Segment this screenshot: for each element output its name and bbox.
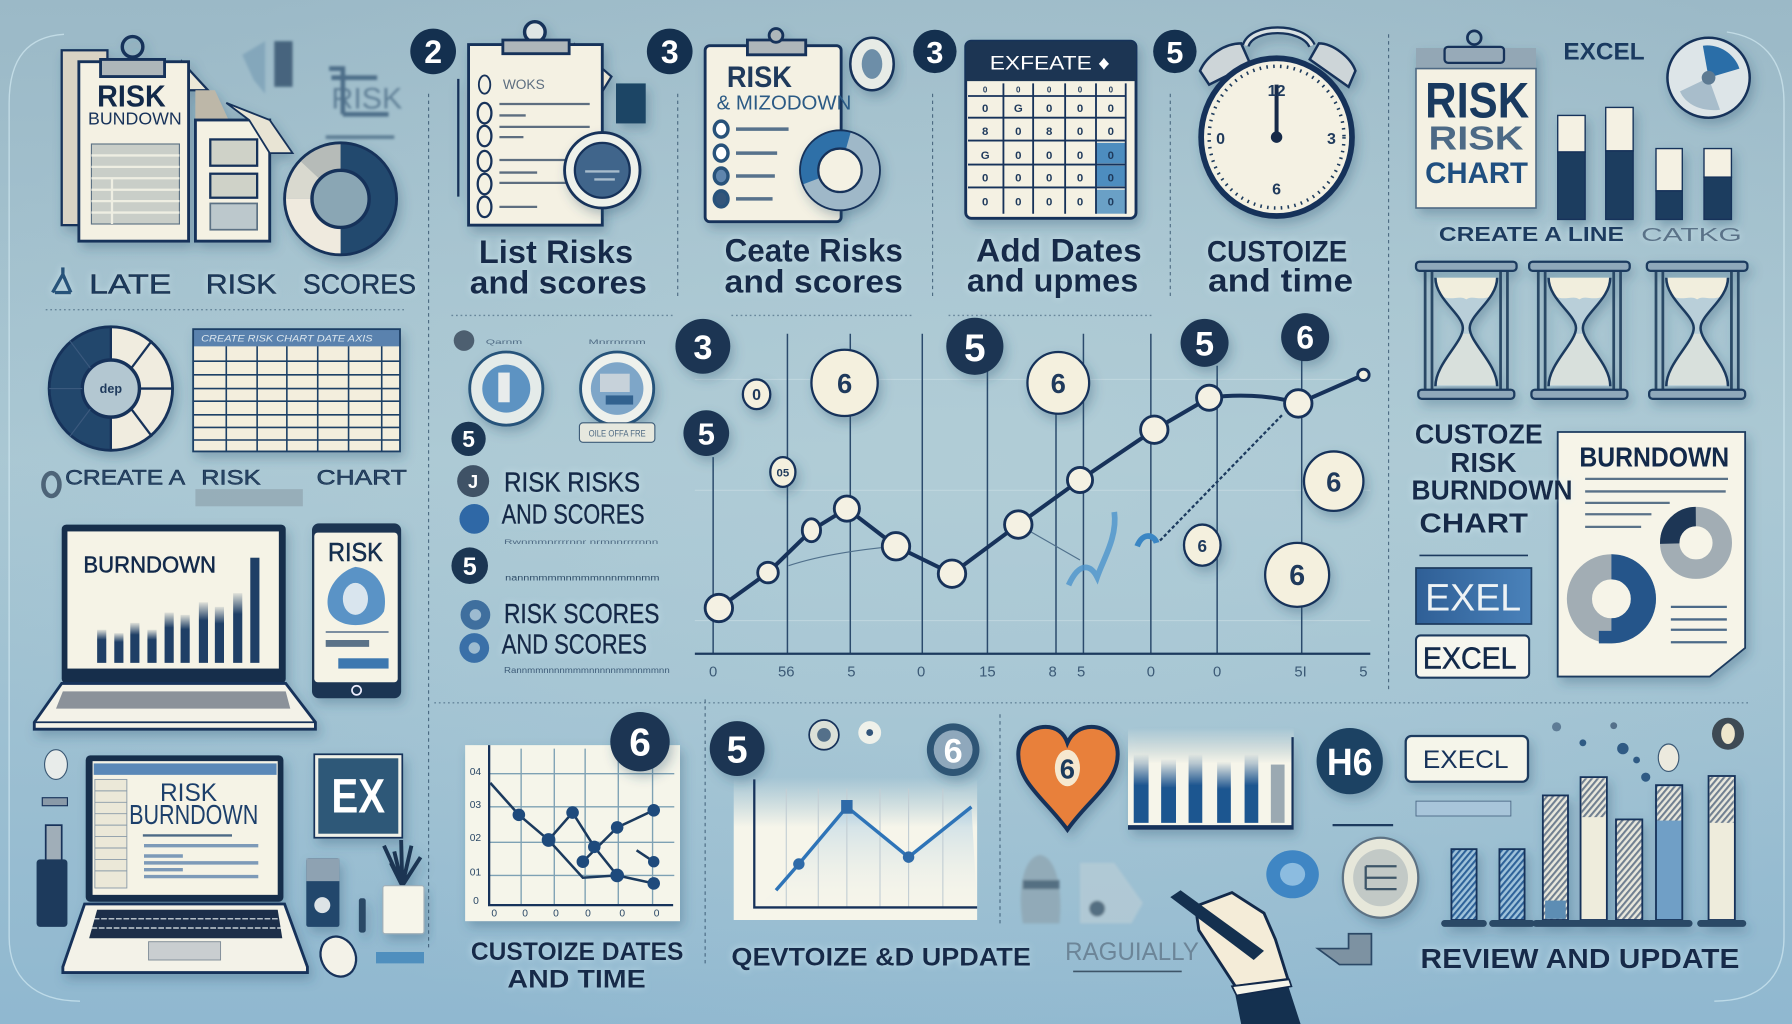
- axis labels: 04: [470, 767, 481, 778]
- laptop bar chart: [97, 558, 259, 663]
- heading: customize risk burndown chart: CUSTOZE: [1415, 418, 1543, 449]
- panel: create risks clipboard: [705, 29, 903, 300]
- scattered icons: [1552, 718, 1744, 782]
- clipboard text: RISK: [1429, 121, 1524, 158]
- callout numerals: 6: [1051, 368, 1066, 399]
- axis labels: 0: [473, 896, 479, 907]
- callout numerals: 05: [777, 468, 790, 480]
- step 5 badge: 5: [462, 426, 475, 452]
- axis labels: 0: [1147, 665, 1155, 681]
- line series: [490, 783, 654, 883]
- chart card: [734, 777, 977, 920]
- axis labels: 8: [1048, 665, 1057, 681]
- laptop title: BURNDOWN: [83, 552, 216, 578]
- heading: late risk scores: SCORES: [303, 269, 416, 300]
- icon: hourglass 2: [1529, 262, 1630, 399]
- heading: review and update: REVIEW AND UPDATE: [1421, 943, 1739, 974]
- axis labels: 0: [709, 665, 717, 681]
- axis labels: 56: [778, 665, 795, 681]
- panel: calendar: [966, 41, 1142, 298]
- checklist rows: WOKS: [503, 77, 545, 92]
- icon: round gauge: [1667, 38, 1750, 118]
- clipboard text: [1425, 72, 1529, 190]
- step 5 badge: [451, 422, 486, 456]
- text: risk risks and scores: AND SCORES: [502, 498, 645, 529]
- icon: calendar: [966, 41, 1136, 218]
- icon: excel tile: [314, 754, 402, 838]
- text: risk scores and scores: RISK SCORES: [504, 598, 659, 629]
- heading: customize risk burndown chart: BURNDOWN: [1411, 474, 1573, 505]
- calendar digits: 80800: [982, 126, 1114, 138]
- panel: customize dates chart: [465, 712, 683, 993]
- heading: create a risk chart: RISK: [201, 465, 261, 490]
- callout numerals: [752, 368, 1341, 592]
- clipboard text: RISK: [1425, 72, 1529, 129]
- heading: list risks and scores: and scores: [470, 265, 647, 301]
- button: blue excel: EXEL: [1425, 576, 1521, 618]
- heading: customize risk burndown chart: RISK: [1450, 447, 1517, 478]
- donut chart: [49, 326, 173, 451]
- calendar digits: 00000: [982, 173, 1114, 185]
- axis labels: 0: [917, 665, 925, 681]
- heading: list risks and scores: List Risks: [479, 234, 633, 270]
- icon: desk objects: [37, 750, 67, 927]
- callout numerals: 6: [1198, 536, 1207, 556]
- heading: customize risk burndown chart: [1411, 418, 1573, 539]
- axis labels: [709, 665, 1368, 681]
- panel: risk scores list: [451, 330, 670, 675]
- heading: customize and time: [1207, 236, 1353, 298]
- heading: create risks and scores: Ceate Risks: [725, 233, 903, 269]
- panel: heart and bars: [1018, 718, 1744, 1024]
- button: execl: [1406, 736, 1528, 782]
- panel: update area chart: [710, 720, 1031, 972]
- heading: add dates and upmes: Add Dates: [976, 233, 1142, 269]
- screen title: risk burndown: RISK: [160, 779, 217, 807]
- panel: hourglasses: [1416, 262, 1747, 399]
- icon: heart: [1018, 727, 1118, 830]
- icon: laptop: [63, 755, 307, 973]
- clipboard title: RISK: [97, 78, 166, 113]
- large donut: [1579, 567, 1643, 631]
- ghost objects: [1021, 855, 1143, 923]
- heading: customize and update: QEVTOIZE &D UPDATE: [731, 944, 1031, 972]
- icon: pen cup: [383, 840, 424, 934]
- step 3 badge: 3: [661, 34, 679, 70]
- callout numerals: 6: [1326, 466, 1341, 497]
- step 6 badge: [610, 712, 670, 771]
- phone title: RISK: [328, 537, 383, 567]
- axis labels: 03: [470, 800, 481, 811]
- callout numerals: 0: [752, 387, 761, 404]
- data points: [705, 369, 1369, 622]
- step 5 badge: [710, 721, 765, 776]
- donut chart: [800, 130, 880, 210]
- heading: late risk scores: [53, 267, 416, 300]
- heading: create a line chart: CREATE A LINE: [1439, 223, 1624, 246]
- clipboard subtitle: & MIZODOWN: [717, 92, 851, 115]
- panel: risk burndown documents: [53, 37, 416, 300]
- badge numerals: 5: [698, 417, 715, 452]
- badge numerals: 6: [1296, 320, 1314, 356]
- heading: customize dates and time: AND TIME: [507, 965, 646, 993]
- badge numerals: [693, 320, 1314, 452]
- table header text: CREATE RISK CHART DATE AXIS: [201, 334, 373, 344]
- heading: add dates and upmes: and upmes: [967, 262, 1138, 298]
- text: risk risks and scores: [502, 466, 645, 529]
- callout numerals: 6: [1289, 560, 1305, 592]
- icon: desk device: [306, 858, 366, 933]
- clipboard text: CHART: [1425, 157, 1528, 190]
- panel: laptop with excel: [37, 750, 424, 982]
- icon: mouse: [314, 931, 363, 982]
- axis labels: 5: [1077, 665, 1085, 681]
- icon: clipboard: [1416, 31, 1536, 208]
- heading: customize dates and time: [471, 938, 683, 993]
- icon: hand with pen: [1170, 890, 1301, 1024]
- heading: create a line chart: [1439, 223, 1742, 246]
- text: regularly: RAGUIALLY: [1065, 938, 1199, 966]
- series markers: [513, 804, 660, 890]
- text: risk risks and scores: RISK RISKS: [504, 466, 640, 497]
- clock numerals: 12: [1268, 83, 1286, 100]
- badge numerals: 5: [964, 327, 986, 370]
- icon: circular image 1: [470, 352, 543, 425]
- heading: create risks and scores: and scores: [725, 264, 903, 300]
- axis labels: 02: [470, 833, 481, 844]
- donut label: dep: [100, 382, 122, 396]
- heading: create a line chart: CATKG: [1641, 224, 1742, 245]
- bar panel: [1128, 728, 1294, 830]
- ghost artwork: RISK: [331, 83, 402, 116]
- number badges: [675, 313, 1329, 456]
- calendar digits: 00000: [983, 86, 1114, 95]
- axis labels: [470, 767, 660, 920]
- icon: round badge: [850, 38, 894, 90]
- clipboard subtitle: BUNDOWN: [88, 109, 182, 129]
- calendar header: EXFEATE ♦: [990, 53, 1110, 75]
- caption: nannmmmmnmmmnnnmmnmm: [505, 574, 660, 583]
- heading: create risks and scores: [725, 233, 903, 300]
- step 2 badge: [410, 29, 456, 74]
- icon: blue oval: [1266, 850, 1319, 898]
- panel: laptop and phone: [34, 523, 401, 729]
- data line: [719, 375, 1363, 608]
- caption: Rwnmmnrrrrnnr nrmnnrrrrnnn: [504, 539, 659, 546]
- panel: list risks clipboard: [458, 22, 647, 301]
- icon: clipboard documents: [62, 37, 293, 241]
- step 5 badge: 5: [463, 553, 477, 581]
- ghost artwork: [242, 41, 402, 137]
- clock numerals: 0: [1216, 131, 1225, 148]
- heading: add dates and upmes: [967, 233, 1142, 298]
- step 6 badge: [927, 723, 979, 776]
- heading: late risk scores: RISK: [206, 269, 277, 300]
- small bar: [1333, 801, 1511, 825]
- icon: clip: [376, 952, 424, 963]
- line chart: risk burndown: [675, 313, 1370, 681]
- bar chart: [1558, 107, 1731, 219]
- dotted trend and squiggle: [789, 415, 1282, 585]
- button: execl: EXECL: [1423, 746, 1509, 774]
- axis labels: 01: [470, 867, 481, 878]
- clock numerals: 3: [1327, 131, 1336, 148]
- icon: laptop: [34, 525, 315, 729]
- heading: customize risk burndown chart: CHART: [1419, 508, 1528, 539]
- panel: risk donut and table: [43, 326, 407, 506]
- bullet rows: [714, 121, 789, 207]
- small label pill: OILE OFFA FRE: [589, 429, 646, 439]
- calendar digits: G0000: [981, 150, 1114, 162]
- screen title: risk burndown: [129, 779, 258, 830]
- icon: heart: 6: [1060, 753, 1075, 784]
- label: excel: EXCEL: [1563, 38, 1645, 65]
- checklist rows: [478, 75, 590, 217]
- axis labels: 000000: [491, 909, 660, 920]
- review bar chart: [1445, 776, 1743, 923]
- callout numerals: 6: [837, 368, 852, 399]
- screen title: risk burndown: BURNDOWN: [129, 799, 258, 830]
- grid: [695, 334, 1370, 654]
- icon: hourglass 1: [1416, 262, 1517, 399]
- heading: list risks and scores: [470, 234, 647, 301]
- axis labels: 0: [1213, 665, 1221, 681]
- button: white excel: EXCEL: [1423, 641, 1517, 676]
- step 3 badge: [913, 30, 957, 73]
- icon: small badge: [454, 330, 646, 351]
- icon: hourglass 3: [1647, 262, 1747, 399]
- document: burndown report: [1558, 432, 1745, 677]
- text: risk scores and scores: [502, 598, 659, 660]
- chart card: [465, 745, 680, 921]
- heading: create a risk chart: [43, 465, 407, 506]
- badge numerals: 5: [1195, 325, 1214, 363]
- icon: white badge: [1343, 838, 1418, 918]
- step 6 badge: 6: [629, 721, 651, 764]
- H6 badge: H6: [1327, 741, 1373, 783]
- icon: circular image 2: [581, 352, 654, 425]
- axis labels: 5I: [1294, 665, 1307, 681]
- cream callouts: [743, 350, 1363, 607]
- step 5 badge: [1153, 30, 1197, 73]
- small donut: [1670, 517, 1722, 569]
- caption: Rannmmnnnnmmmnnnnnmmnnmmnn: [504, 666, 670, 675]
- donut chart: [285, 143, 397, 255]
- icon: small badge: Qarnm: [486, 339, 523, 346]
- calendar digits: 00000: [982, 197, 1114, 209]
- text: risk scores and scores: AND SCORES: [502, 629, 647, 660]
- calendar digits: 0G000: [982, 103, 1114, 115]
- clock numerals: 6: [1272, 181, 1281, 198]
- step 6 badge: 6: [944, 732, 963, 770]
- row icons: [459, 600, 490, 663]
- heading: customize and time: CUSTOIZE: [1207, 236, 1347, 269]
- heading: customize and time: and time: [1208, 262, 1353, 298]
- row icon: J: [468, 471, 478, 492]
- axis labels: 15: [979, 665, 996, 681]
- H6 badge: [1317, 728, 1383, 794]
- icon: excel tile: EX: [331, 771, 385, 824]
- icon: phone: [312, 523, 401, 698]
- heading: late risk scores: LATE: [89, 269, 171, 300]
- axis labels: 5: [847, 665, 856, 681]
- small icons: [809, 720, 881, 750]
- step 5 badge: 5: [727, 728, 748, 770]
- icon: alarm clock: [1200, 30, 1355, 216]
- step 3 badge: [647, 29, 693, 74]
- heading: create a risk chart: CREATE A: [65, 465, 186, 490]
- row icon: [457, 465, 489, 497]
- panel: risk chart clipboard and bars: [1416, 31, 1750, 246]
- icon: small badge: Mnrrnrrnm: [589, 339, 646, 346]
- icon: magnifier: [565, 133, 640, 208]
- step 5 badge: 5: [1166, 35, 1183, 70]
- clipboard title: RISK: [727, 61, 793, 94]
- document: burndown report: BURNDOWN: [1579, 441, 1729, 472]
- icon: small frame: [1318, 934, 1371, 965]
- step 3 badge: 3: [926, 35, 943, 70]
- heading: create a risk chart: CHART: [317, 465, 407, 490]
- calendar digits: [981, 86, 1114, 209]
- panel: alarm clock: [1200, 30, 1355, 298]
- step 2 badge: 2: [424, 34, 442, 70]
- data table: [193, 329, 400, 451]
- axis labels: 5: [1359, 665, 1368, 681]
- button: blue excel: [1416, 568, 1531, 624]
- heading: customize dates and time: CUSTOIZE DATES: [471, 938, 683, 966]
- small label pill: [579, 423, 655, 442]
- panel: customize burndown and excel: [1411, 418, 1745, 678]
- badge numerals: 3: [693, 329, 712, 367]
- step 5 badge: [451, 547, 488, 584]
- row icon: [459, 504, 489, 534]
- clock numerals: [1216, 83, 1336, 198]
